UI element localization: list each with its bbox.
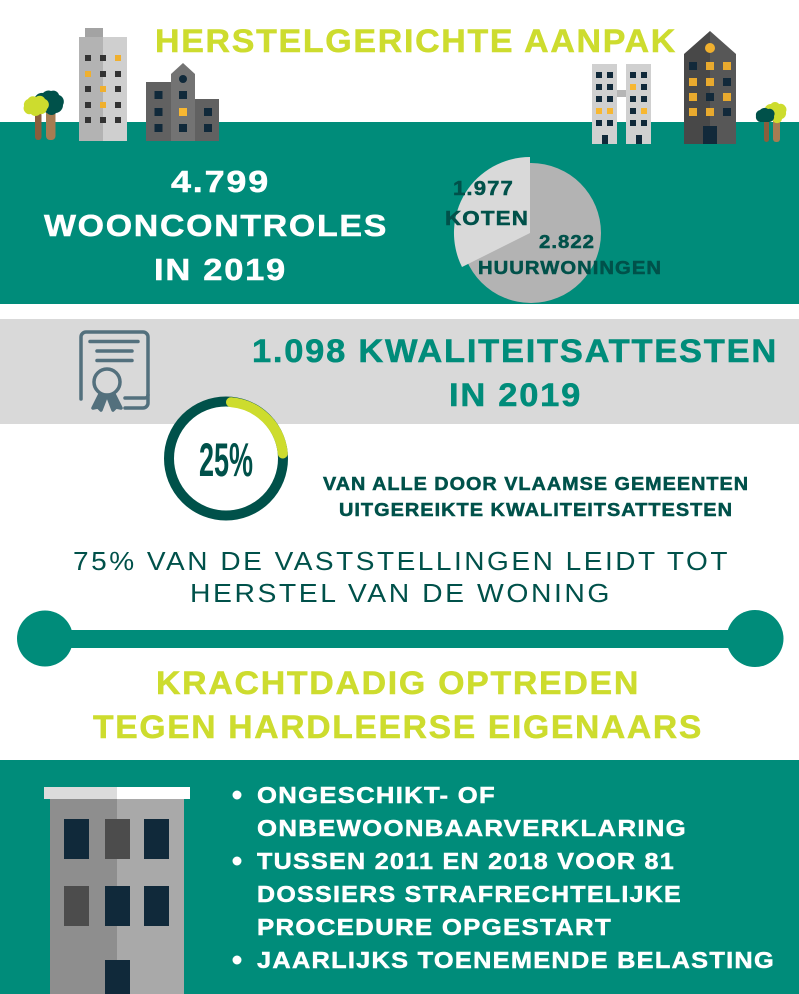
heading: kwaliteitsattesten: IN 2019 [449, 377, 582, 413]
bullet list: TUSSEN 2011 EN 2018 VOOR 81 [257, 848, 675, 874]
pie chart: 1.977 [453, 178, 514, 200]
panel: kwaliteitsattesten band [0, 319, 799, 424]
pie chart [445, 157, 662, 303]
pie chart: HUURWONINGEN [478, 258, 662, 278]
heading: krachtdadig optreden: KRACHTDADIG OPTREDEN [156, 665, 640, 701]
icon: twin tower building [592, 64, 651, 144]
text: vaststellingen: HERSTEL VAN DE WONING [190, 578, 612, 608]
bullet list: ONGESCHIKT- OF [257, 782, 496, 808]
icon: certificate [81, 332, 148, 410]
divider connector [17, 610, 784, 667]
text: woningcontroles: 4.799 [171, 164, 270, 199]
text: vaststellingen [73, 546, 730, 608]
heading: krachtdadig optreden [93, 665, 703, 745]
text: woningcontroles: IN 2019 [154, 252, 287, 287]
donut chart: 25%: 25% [199, 433, 253, 486]
title: HERSTELGERICHTE AANPAK [155, 23, 677, 59]
panel: bottom green band [0, 760, 799, 994]
bullet list: DOSSIERS STRAFRECHTELIJKE [257, 881, 682, 907]
text: aandeel gemeenten [323, 474, 749, 520]
bullet list: PROCEDURE OPGESTART [257, 914, 612, 940]
text: woningcontroles [44, 164, 388, 287]
donut chart: 25% [169, 402, 283, 516]
text: aandeel gemeenten: VAN ALLE DOOR VLAAMSE GEMEENTEN [323, 474, 749, 494]
icon: trees right [756, 102, 786, 142]
icon: large building [44, 787, 190, 994]
pie chart: 2.822 [539, 232, 595, 252]
text: vaststellingen: 75% VAN DE VASTSTELLINGEN LEIDT TOT [73, 546, 730, 576]
bullet list: ONBEWOONBAARVERKLARING [257, 815, 687, 841]
icon: dark church-like building [146, 63, 219, 141]
heading: kwaliteitsattesten: 1.098 KWALITEITSATTESTEN [252, 333, 778, 369]
text: woningcontroles: WOONCONTROLES [44, 208, 388, 243]
heading: kwaliteitsattesten [252, 333, 778, 413]
icon: tall dark building with lit windows [684, 31, 736, 144]
panel: top green band [0, 122, 799, 304]
pie chart: KOTEN [445, 208, 529, 230]
bullet list [233, 782, 775, 973]
bullet list: JAARLIJKS TOENEMENDE BELASTING [257, 947, 775, 973]
heading: krachtdadig optreden: TEGEN HARDLEERSE EIGENAARS [93, 709, 703, 745]
icon: tall grey building [79, 28, 127, 141]
text: aandeel gemeenten: UITGEREIKTE KWALITEITSATTESTEN [339, 500, 733, 520]
icon: trees left [24, 90, 64, 140]
